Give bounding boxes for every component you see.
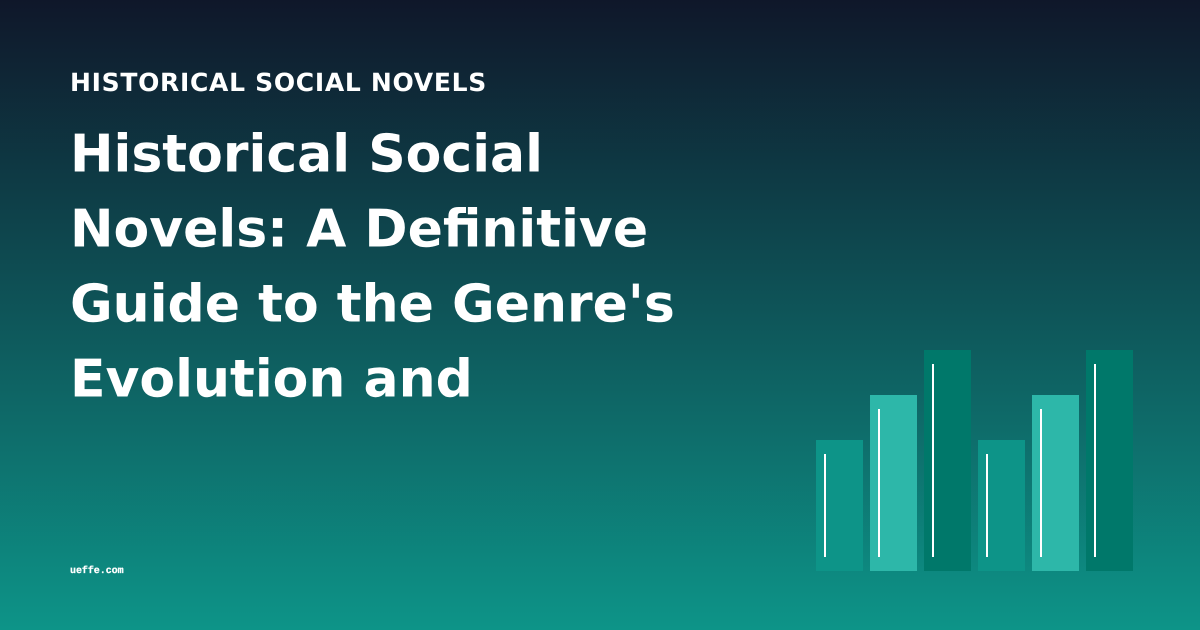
bar 6 bbox=[1086, 350, 1133, 571]
bar 1 bbox=[816, 440, 863, 571]
title: Novels: A Definitive bbox=[70, 200, 648, 260]
bar 2 bbox=[870, 395, 917, 571]
bar 5 bbox=[1032, 395, 1079, 571]
bar 3 bbox=[924, 350, 971, 571]
kicker heading: HISTORICAL SOCIAL NOVELS bbox=[70, 68, 487, 97]
bar 4 bbox=[978, 440, 1025, 571]
title: Historical Social bbox=[70, 124, 543, 184]
title: Guide to the Genre's bbox=[70, 274, 675, 334]
bar chart illustration bbox=[816, 350, 1133, 571]
title: Evolution and bbox=[70, 350, 473, 410]
footer domain: ueffe.com bbox=[70, 565, 124, 577]
